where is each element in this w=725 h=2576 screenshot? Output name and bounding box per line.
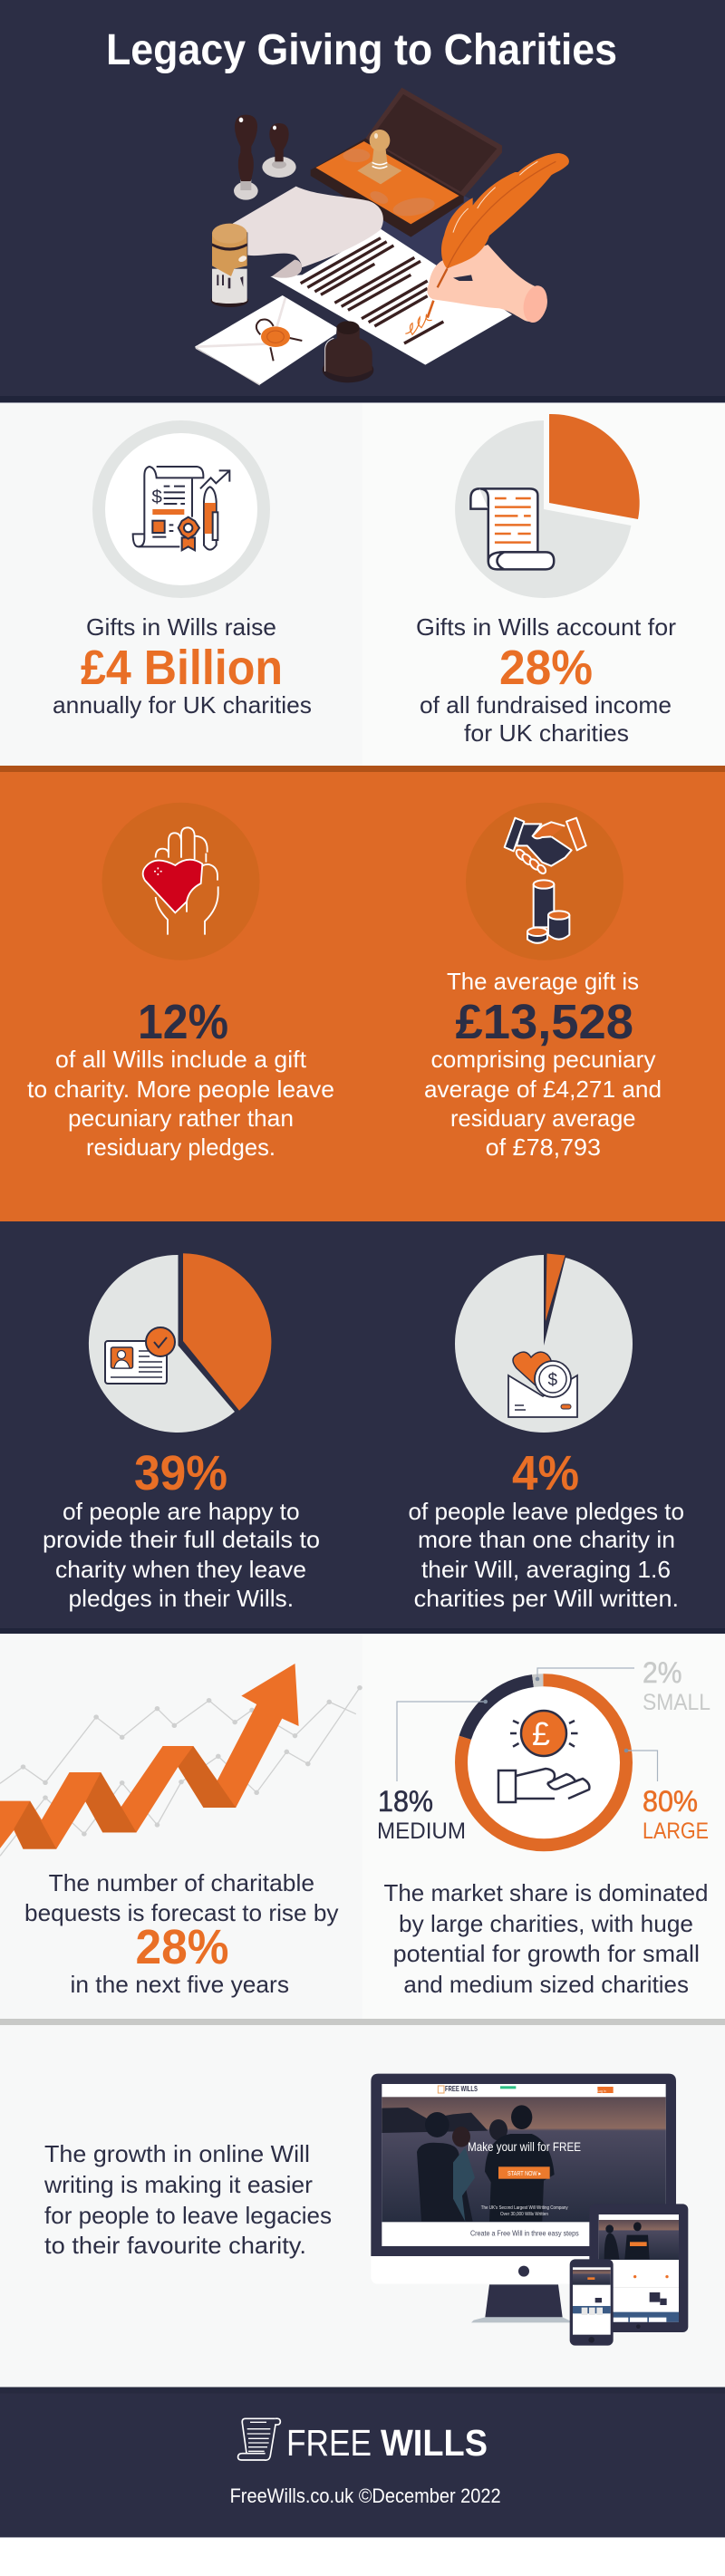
text: gifts in wills raise xyxy=(53,613,312,719)
website text: Make your will for FREE xyxy=(468,2139,581,2154)
icon: scroll logo xyxy=(238,2418,280,2460)
panel: donor behaviour xyxy=(0,1221,725,1634)
text: market share: by large charities, with huge xyxy=(399,1910,693,1937)
text: gifts in wills raise: annually for UK charities xyxy=(53,691,312,719)
label: small: SMALL xyxy=(643,1690,710,1715)
icon: pound coin over hand xyxy=(498,1711,589,1802)
label: medium xyxy=(377,1785,466,1844)
panel: gift statistics xyxy=(0,772,725,1221)
text: 39 percent: provide their full details to xyxy=(43,1526,320,1553)
text: market share: and medium sized charities xyxy=(403,1971,689,1998)
label: large: 80% xyxy=(643,1785,698,1818)
text: 4 percent: charities per Will written. xyxy=(414,1585,679,1612)
website text xyxy=(445,2085,606,2238)
icon: pound coin over hand: £ xyxy=(532,1715,550,1752)
text: average gift: average of £4,271 and xyxy=(424,1076,662,1103)
website text: Log In xyxy=(598,2089,606,2093)
icon: handshake and coins xyxy=(466,803,624,960)
icon: heart in hand xyxy=(102,803,259,960)
logo wordmark: WILLS xyxy=(381,2422,488,2464)
text: 39 percent: of people are happy to xyxy=(63,1498,300,1525)
text: 39 percent: charity when they leave xyxy=(55,1556,306,1583)
text: online will writing: to their favourite charity. xyxy=(44,2232,306,2259)
text: gifts in wills account for: 28% xyxy=(499,641,593,695)
panel: header xyxy=(0,0,725,403)
website text: START NOW ▸ xyxy=(508,2171,541,2177)
chart: 28% pie with scroll icon xyxy=(455,414,640,598)
illustration: website on desktop, tablet and phone xyxy=(371,2074,688,2346)
text: gifts in wills raise: £4 Billion xyxy=(81,641,283,695)
text: 12 percent: residuary pledges. xyxy=(86,1134,276,1161)
logo wordmark: FREE xyxy=(286,2422,372,2464)
text: charitable bequests forecast xyxy=(24,1869,339,1998)
website text: The UK's Second Largest Will Writing Company xyxy=(481,2205,568,2211)
text: online will writing: writing is making it easier xyxy=(44,2171,313,2198)
label: small: 2% xyxy=(643,1656,682,1689)
text: 4 percent: more than one charity in xyxy=(418,1526,675,1553)
chart: 4% pie with envelope icon: $ xyxy=(547,1371,558,1390)
text: online will writing: The growth in online Will xyxy=(44,2140,310,2167)
text: online will writing: for people to leave legacies xyxy=(44,2202,332,2229)
text: gifts in wills raise: Gifts in Wills raise xyxy=(86,613,276,641)
label: large: LARGE xyxy=(643,1819,709,1844)
chart: market share donut xyxy=(377,1656,710,1845)
icon: document with certificate and pen in ring xyxy=(99,427,264,592)
text: 12 percent: to charity. More people leave xyxy=(27,1076,334,1103)
text: online will writing xyxy=(44,2140,332,2259)
text: charitable bequests forecast: 28% xyxy=(136,1920,228,1974)
footer credit: FreeWills.co.uk ©December 2022 xyxy=(230,2484,501,2507)
text: average gift: of £78,793 xyxy=(486,1134,601,1161)
text: market share: potential for growth for small xyxy=(393,1940,700,1967)
callout lines xyxy=(397,1668,658,1781)
text: average gift: £13,528 xyxy=(455,995,633,1049)
text: 12 percent: 12% xyxy=(138,995,228,1049)
text: 12 percent: pecuniary rather than xyxy=(68,1105,294,1132)
website text: Create a Free Will in three easy steps xyxy=(470,2229,579,2238)
panel: footer xyxy=(0,2387,725,2538)
text: market share: The market share is dominated xyxy=(384,1879,709,1906)
label: medium: 18% xyxy=(378,1785,433,1818)
text: 39 percent: 39% xyxy=(134,1446,227,1500)
logo wordmark xyxy=(286,2422,488,2464)
label: medium: MEDIUM xyxy=(377,1819,466,1844)
text: charitable bequests forecast: in the next five years xyxy=(71,1971,289,1998)
chart: 4% pie with envelope icon xyxy=(455,1250,633,1433)
chart: rising zigzag arrow xyxy=(0,1664,362,1856)
text: 4 percent xyxy=(408,1446,684,1612)
text: gifts in wills account for: for UK charities xyxy=(464,719,629,747)
website text: FREE WILLS xyxy=(445,2085,478,2093)
label: large xyxy=(643,1785,709,1844)
text: 39 percent: pledges in their Wills. xyxy=(69,1585,294,1612)
icon: document with certificate and pen in ring: $ xyxy=(151,487,162,507)
text: charitable bequests forecast: The number of charitable xyxy=(49,1869,314,1896)
title: Legacy Giving to Charities xyxy=(106,26,617,74)
illustration: desk with will, quill and wax seals xyxy=(195,88,569,386)
text: gifts in wills account for xyxy=(416,613,676,747)
chart: 39% pie with ID card icon xyxy=(89,1253,271,1433)
text: average gift: residuary average xyxy=(450,1105,636,1132)
panel: gifts in wills overview xyxy=(0,403,725,772)
text: 4 percent: their Will, averaging 1.6 xyxy=(421,1556,671,1583)
text: 4 percent: of people leave pledges to xyxy=(408,1498,684,1525)
text: gifts in wills account for: of all fundraised income xyxy=(420,691,672,719)
panel: growth and market share xyxy=(0,1634,725,2025)
label: small xyxy=(643,1656,710,1715)
text: gifts in wills account for: Gifts in Wills account for xyxy=(416,613,676,641)
text: 12 percent: of all Wills include a gift xyxy=(55,1046,307,1073)
text: market share xyxy=(384,1879,709,1998)
website text: Over 30,000 Wills Written xyxy=(500,2212,548,2217)
text: 39 percent xyxy=(43,1446,320,1612)
text: 12 percent xyxy=(27,995,334,1161)
text: average gift: comprising pecuniary xyxy=(431,1046,656,1073)
text: charitable bequests forecast: bequests is forecast to rise by xyxy=(24,1899,339,1926)
text: 4 percent: 4% xyxy=(512,1446,579,1500)
text: average gift xyxy=(424,968,662,1161)
panel: online will writing xyxy=(0,2025,725,2388)
text: average gift: The average gift is xyxy=(447,968,639,995)
